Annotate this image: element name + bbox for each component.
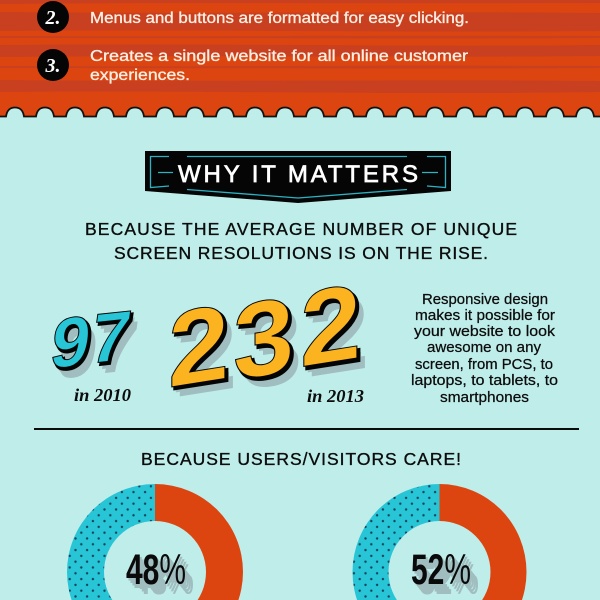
list item 2: 2. <box>44 7 60 29</box>
scalloped edge <box>0 108 600 116</box>
text block: responsive design: smartphones <box>440 390 529 406</box>
stat: 97 in 2010: 9 <box>48 304 98 387</box>
heading: users care: BECAUSE USERS/VISITORS CARE! <box>141 449 461 469</box>
stat: 232 in 2013: 2 <box>300 261 361 390</box>
stat: 232 in 2013: in 2013 <box>307 386 364 406</box>
stat: 232 in 2013: 3 <box>241 284 302 413</box>
stat: 232 in 2013: 2 <box>308 271 369 400</box>
stat: 232 in 2013: 2 <box>302 264 364 393</box>
donut chart: 48%: 48% <box>126 546 186 594</box>
stat: 97 in 2010: 7 <box>93 307 143 390</box>
donut chart: 52%: 52% <box>411 546 471 594</box>
stat: 232 in 2013: 2 <box>170 284 232 413</box>
donut chart: 52% <box>352 484 526 600</box>
stat: 232 in 2013: 2 <box>172 287 233 416</box>
stat: 232 in 2013: 3 <box>236 277 297 406</box>
text block: responsive design: makes it possible for <box>415 308 555 324</box>
heading: resolutions on the rise <box>85 219 517 263</box>
donut chart: 48%: 48% <box>130 551 190 599</box>
stat: 97 in 2010 <box>46 296 143 405</box>
donut chart: 48% <box>67 484 243 600</box>
panel: red features band <box>0 0 600 116</box>
stat: 97 in 2010: 9 <box>53 312 103 395</box>
text block: responsive design: laptops, to tablets, to <box>411 373 558 389</box>
text block: responsive design <box>411 292 558 406</box>
stat: 232 in 2013: 2 <box>304 267 365 396</box>
stat: 232 in 2013 <box>168 261 369 420</box>
heading: resolutions on the rise: BECAUSE THE AVERAGE NUMBER OF UNIQUE <box>85 219 517 239</box>
donut chart: 48%: 48% <box>128 548 188 596</box>
list item 3 <box>37 48 468 84</box>
stat: 97 in 2010: 7 <box>86 296 136 379</box>
list item 2 <box>37 1 469 33</box>
stat: 97 in 2010: 9 <box>50 308 100 391</box>
stat: 232 in 2013: 3 <box>233 274 294 403</box>
stat: 97 in 2010: in 2010 <box>74 385 131 405</box>
heading badge: why it matters: WHY IT MATTERS <box>178 161 418 188</box>
list item 2: Menus and buttons are formatted for easy clicking. <box>90 10 469 27</box>
stat: 232 in 2013: 2 <box>176 291 237 420</box>
donut chart: 52%: 52% <box>413 548 473 596</box>
text block: responsive design: awesome on any <box>427 340 542 356</box>
stat: 232 in 2013: 2 <box>168 282 229 411</box>
stat: 97 in 2010: 7 <box>90 303 140 386</box>
list item 3: Creates a single website for all online customer <box>90 48 468 65</box>
text block: responsive design: Responsive design <box>422 292 548 308</box>
list item 3: 3. <box>44 55 60 77</box>
donut chart: 52%: 52% <box>415 551 475 599</box>
text block: responsive design: your website to look <box>414 324 556 340</box>
divider <box>34 428 579 430</box>
stat: 97 in 2010: 7 <box>88 299 138 382</box>
stat: 97 in 2010: 9 <box>46 301 96 384</box>
list item 3: experiences. <box>90 67 190 84</box>
text block: responsive design: screen, from PCS, to <box>415 357 553 373</box>
stat: 232 in 2013: 3 <box>237 280 298 409</box>
heading badge: why it matters <box>145 151 451 203</box>
heading: resolutions on the rise: SCREEN RESOLUTIONS IS ON THE RISE. <box>114 243 488 263</box>
